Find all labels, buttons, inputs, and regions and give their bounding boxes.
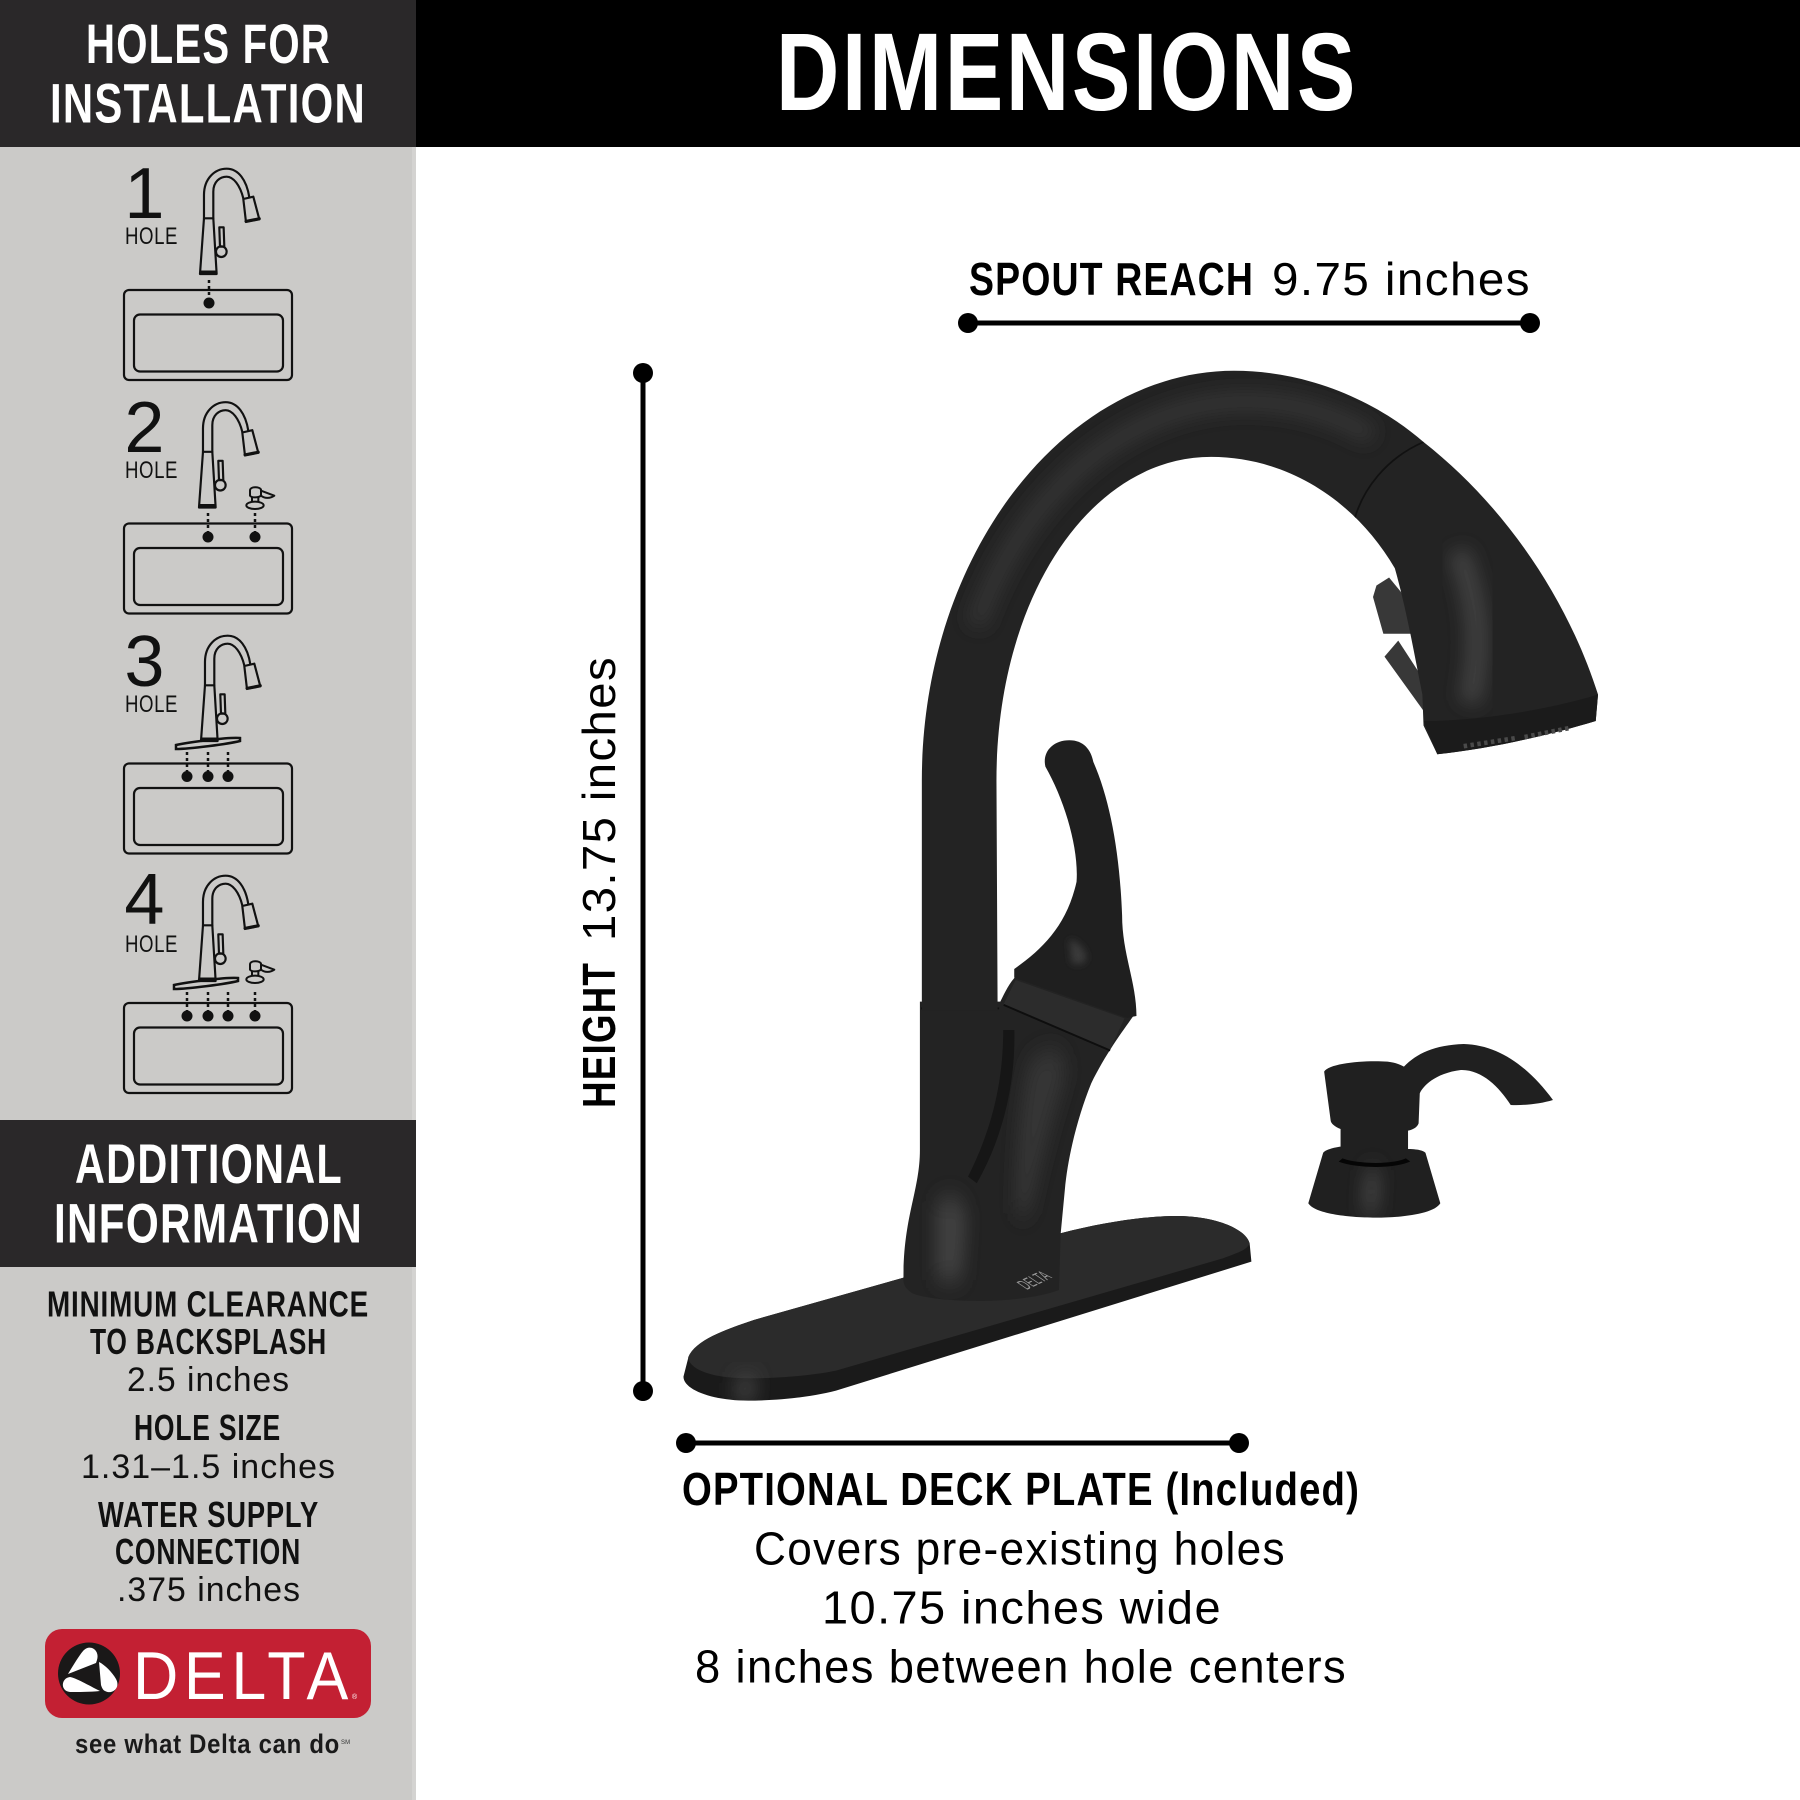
faucet: deck plate	[683, 1216, 1251, 1401]
heading: holes for installation: INSTALLATION	[50, 72, 366, 134]
text block: optional deck plate: Covers pre-existing holes	[754, 1522, 1286, 1574]
heading: additional information: ADDITIONAL	[75, 1132, 343, 1195]
icon group: 1 hole	[124, 154, 292, 380]
text block: optional deck plate: 10.75 inches wide	[822, 1582, 1222, 1634]
icon group: 4 hole: 4	[124, 860, 167, 940]
text block: optional deck plate: 8 inches between hole centers	[695, 1640, 1347, 1692]
icon group: 2 hole: HOLE	[125, 457, 178, 484]
faucet: body	[903, 970, 1135, 1301]
logo: delta: see what Delta can do	[75, 1729, 340, 1759]
dimension: spout reach: 9.75 inches	[1272, 253, 1531, 305]
icon group: 2 hole	[124, 388, 292, 614]
text block: optional deck plate	[682, 1463, 1360, 1692]
heading: additional information	[0, 1120, 416, 1267]
icon group: 4 hole: HOLE	[125, 931, 178, 958]
faucet: handle	[1004, 740, 1136, 1050]
logo: delta: SM	[341, 1740, 350, 1746]
text block: hole size: HOLE SIZE	[134, 1407, 281, 1448]
logo: delta: ®	[352, 1693, 358, 1701]
heading: dimensions: DIMENSIONS	[776, 11, 1358, 134]
heading: additional information: INFORMATION	[54, 1192, 363, 1254]
dimension: spout reach: SPOUT REACH	[969, 253, 1254, 305]
heading: holes for installation	[0, 0, 416, 147]
dimension: deck plate	[676, 1433, 1249, 1453]
text block: hole size	[81, 1407, 336, 1486]
icon group: 1 hole: HOLE	[125, 223, 178, 250]
text block: minimum clearance: 2.5 inches	[127, 1361, 290, 1399]
icon group: 4 hole	[124, 860, 292, 1093]
heading: dimensions	[416, 0, 1800, 147]
text block: hole size: 1.31–1.5 inches	[81, 1448, 336, 1486]
text block: minimum clearance: TO BACKSPLASH	[90, 1321, 327, 1362]
icon group: 3 hole: 3	[124, 622, 167, 702]
icon group: 3 hole: HOLE	[125, 691, 178, 718]
logo: delta	[45, 1629, 371, 1759]
text block: minimum clearance: MINIMUM CLEARANCE	[47, 1284, 369, 1324]
heading: holes for installation: HOLES FOR	[86, 12, 331, 75]
text block: water supply connection: CONNECTION	[115, 1531, 301, 1572]
dimension: height	[573, 363, 653, 1401]
icon group: 3 hole	[124, 622, 292, 854]
icon group: 2 hole: 2	[124, 388, 167, 468]
logo: delta: DELTA	[133, 1638, 354, 1714]
text block: minimum clearance	[47, 1284, 369, 1399]
dimension: spout reach	[958, 253, 1540, 333]
text block: water supply connection	[98, 1494, 319, 1609]
sidebar panel	[0, 0, 416, 1800]
faucet: body: DELTA	[1014, 1269, 1057, 1293]
icon group: 1 hole: 1	[124, 154, 167, 234]
text block: water supply connection: WATER SUPPLY	[98, 1494, 319, 1535]
dimension: height: 13.75 inches	[573, 656, 625, 941]
text block: water supply connection: .375 inches	[117, 1571, 301, 1609]
soap dispenser	[1308, 1044, 1553, 1218]
text block: optional deck plate: OPTIONAL DECK PLATE (Included)	[682, 1463, 1360, 1515]
faucet: spout and pull-down head	[918, 371, 1598, 1010]
dimension: height: HEIGHT	[573, 962, 625, 1108]
